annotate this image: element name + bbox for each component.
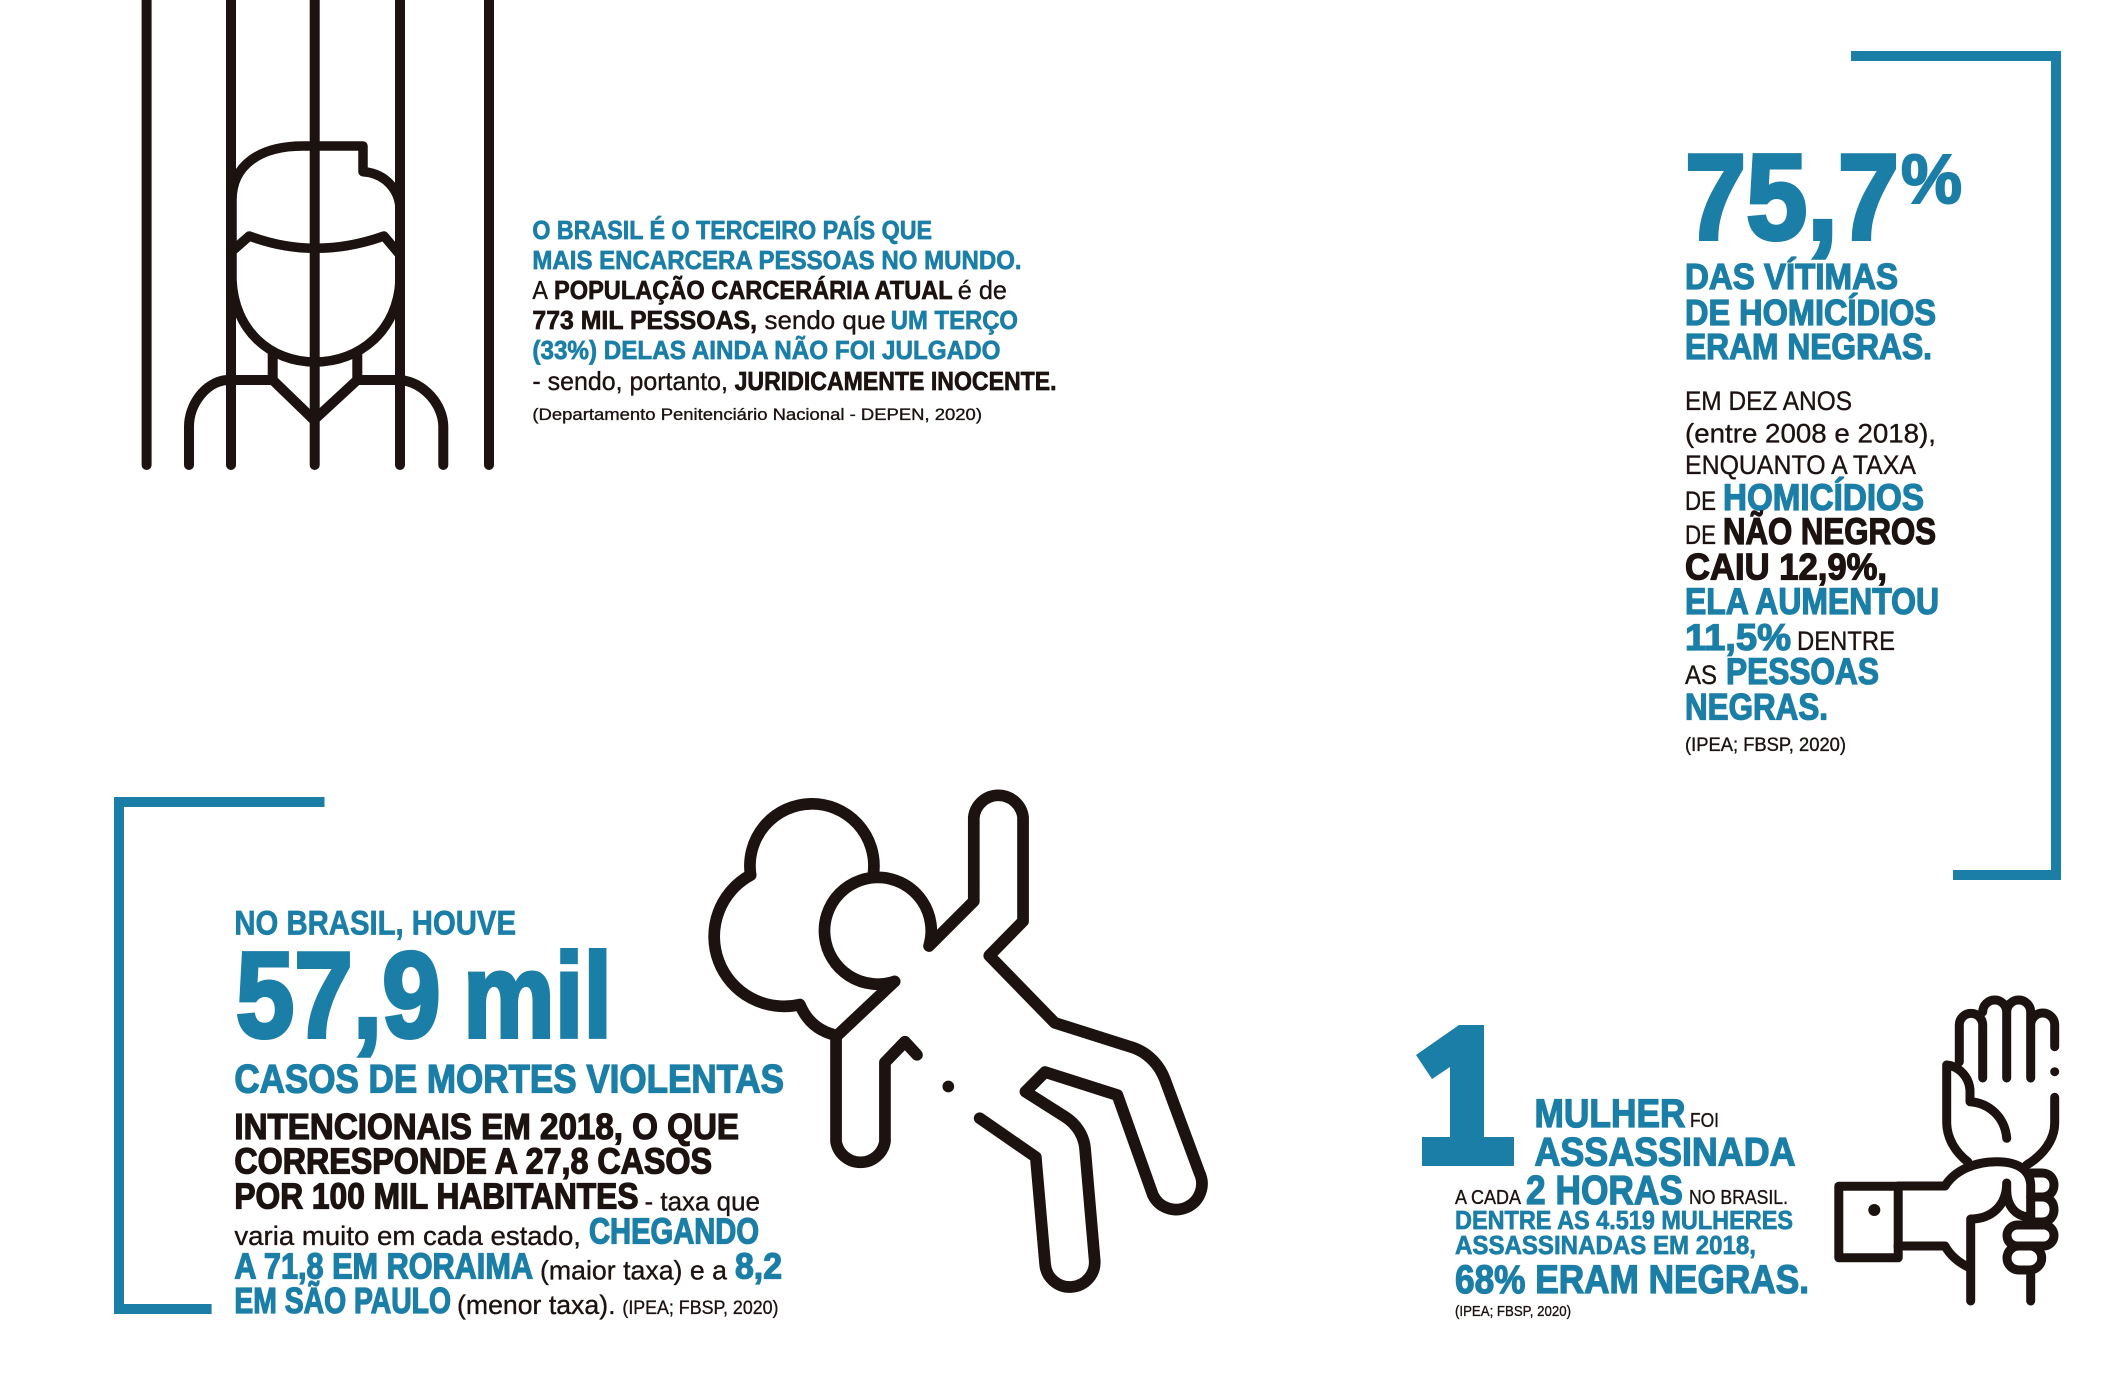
text block: one woman every 2 hours: NO BRASIL. — [1689, 1187, 1788, 1209]
text block: one woman every 2 hours: A CADA — [1455, 1187, 1522, 1209]
text block: rate per 100 thousand: CORRESPONDE A 27,8 CASOS — [234, 1141, 712, 1182]
text block: ten-year comparison: EM DEZ ANOS — [1685, 386, 1852, 416]
panel: violent deaths — [114, 797, 784, 1321]
text block: Brazil prison population: MAIS ENCARCERA PESSOAS NO MUNDO. — [532, 245, 1022, 275]
text block: ten-year comparison: CAIU 12,9%, — [1685, 547, 1887, 588]
text block: Brazil prison population — [532, 215, 1057, 424]
bracket: bottom left — [114, 797, 324, 1314]
text block: Brazil prison population: A — [532, 275, 549, 305]
icon: chalk outline of body — [714, 795, 1202, 1287]
text block: ten-year comparison: NÃO NEGROS — [1723, 510, 1936, 552]
text block: Brazil prison population: UM TERÇO — [891, 305, 1018, 335]
big number 75,7%: % — [1901, 140, 1962, 218]
text block: one woman every 2 hours — [1455, 1092, 1809, 1320]
text block: one woman every 2 hours: DENTRE AS 4.519 MULHERES — [1455, 1205, 1793, 1235]
text block: one woman every 2 hours: ASSASSINADAS EM 2018, — [1455, 1230, 1756, 1260]
panel: women murdered — [1416, 1025, 1809, 1320]
text block: ten-year comparison: NEGRAS. — [1685, 686, 1828, 728]
text block: rate per 100 thousand: 8,2 — [735, 1246, 782, 1287]
heading: casos de mortes violentas: CASOS DE MORTES VIOLENTAS — [234, 1058, 784, 1102]
big number 75,7%: 75,7 — [1685, 129, 1899, 265]
text block: Brazil prison population: sendo que — [764, 305, 886, 335]
text block: one woman every 2 hours: 68% ERAM NEGRAS. — [1455, 1258, 1809, 1302]
text block: rate per 100 thousand: (menor taxa). — [457, 1290, 616, 1320]
big number 1 — [1416, 1025, 1514, 1166]
text block: rate per 100 thousand: EM SÃO PAULO — [234, 1279, 451, 1321]
text block: one woman every 2 hours: 2 HORAS — [1526, 1167, 1683, 1213]
text block: rate per 100 thousand: - taxa que — [644, 1187, 760, 1217]
text block: ten-year comparison: (entre 2008 e 2018), — [1685, 418, 1936, 448]
text block: ten-year comparison: DENTRE — [1797, 626, 1895, 656]
text block: Brazil prison population: é de — [958, 275, 1007, 305]
icon: hand gripping wrist — [1839, 1000, 2059, 1301]
big number 57,9 mil: 57,9 — [236, 927, 441, 1063]
heading: victims: DAS VÍTIMAS — [1685, 256, 1898, 297]
heading: victims — [1685, 256, 1936, 367]
text block: rate per 100 thousand: A 71,8 EM RORAIMA — [234, 1246, 533, 1287]
heading: victims: ERAM NEGRAS. — [1685, 326, 1932, 367]
text block: ten-year comparison: DE — [1685, 520, 1716, 550]
text block: rate per 100 thousand: CHEGANDO — [589, 1211, 759, 1252]
text block: rate per 100 thousand: (IPEA; FBSP, 2020) — [622, 1298, 778, 1319]
panel: homicide of black people — [1685, 51, 2061, 880]
text block: Brazil prison population: JURIDICAMENTE INOCENTE. — [735, 366, 1057, 396]
icon: prisoner behind bars — [147, 0, 489, 465]
text block: ten-year comparison: AS — [1685, 660, 1717, 690]
text block: rate per 100 thousand: POR 100 MIL HABITANTES — [234, 1176, 638, 1217]
big number 57,9 mil: mil — [463, 929, 612, 1063]
big number 57,9 mil — [236, 927, 612, 1063]
text block: ten-year comparison: (IPEA; FBSP, 2020) — [1685, 735, 1846, 756]
text block: Brazil prison population: - sendo, portanto, — [532, 366, 728, 396]
text block: ten-year comparison: HOMICÍDIOS — [1723, 477, 1924, 518]
bracket: top right — [1851, 51, 2061, 880]
text block: ten-year comparison — [1685, 386, 1939, 756]
text block: Brazil prison population: POPULAÇÃO CARCERÁRIA ATUAL — [554, 275, 953, 305]
text block: one woman every 2 hours: ASSASSINADA — [1534, 1131, 1796, 1175]
text block: Brazil prison population: (33%) DELAS AINDA NÃO FOI JULGADO — [532, 335, 1000, 365]
text block: Brazil prison population: 773 MIL PESSOAS, — [532, 305, 757, 335]
text block: Brazil prison population: O BRASIL É O TERCEIRO PAÍS QUE — [532, 215, 932, 245]
text block: ten-year comparison: 11,5% — [1685, 617, 1791, 658]
text block: rate per 100 thousand — [234, 1106, 782, 1321]
heading: victims: DE HOMICÍDIOS — [1685, 292, 1936, 333]
heading: no Brasil, houve: NO BRASIL, HOUVE — [234, 905, 516, 943]
text block: rate per 100 thousand: (maior taxa) e a — [540, 1256, 728, 1286]
text block: ten-year comparison: DE — [1685, 486, 1716, 516]
text block: rate per 100 thousand: INTENCIONAIS EM 2018, O QUE — [234, 1106, 739, 1147]
text block: Brazil prison population: (Departamento Penitenciário Nacional - DEPEN, 2020) — [532, 405, 982, 424]
text block: one woman every 2 hours: MULHER — [1534, 1092, 1686, 1136]
text block: ten-year comparison: PESSOAS — [1726, 651, 1879, 692]
text block: one woman every 2 hours: FOI — [1690, 1110, 1719, 1132]
text block: rate per 100 thousand: varia muito em cada estado, — [234, 1221, 581, 1251]
text block: one woman every 2 hours: (IPEA; FBSP, 2020) — [1455, 1303, 1571, 1320]
text block: ten-year comparison: ENQUANTO A TAXA — [1685, 450, 1916, 480]
text block: ten-year comparison: ELA AUMENTOU — [1685, 581, 1939, 622]
